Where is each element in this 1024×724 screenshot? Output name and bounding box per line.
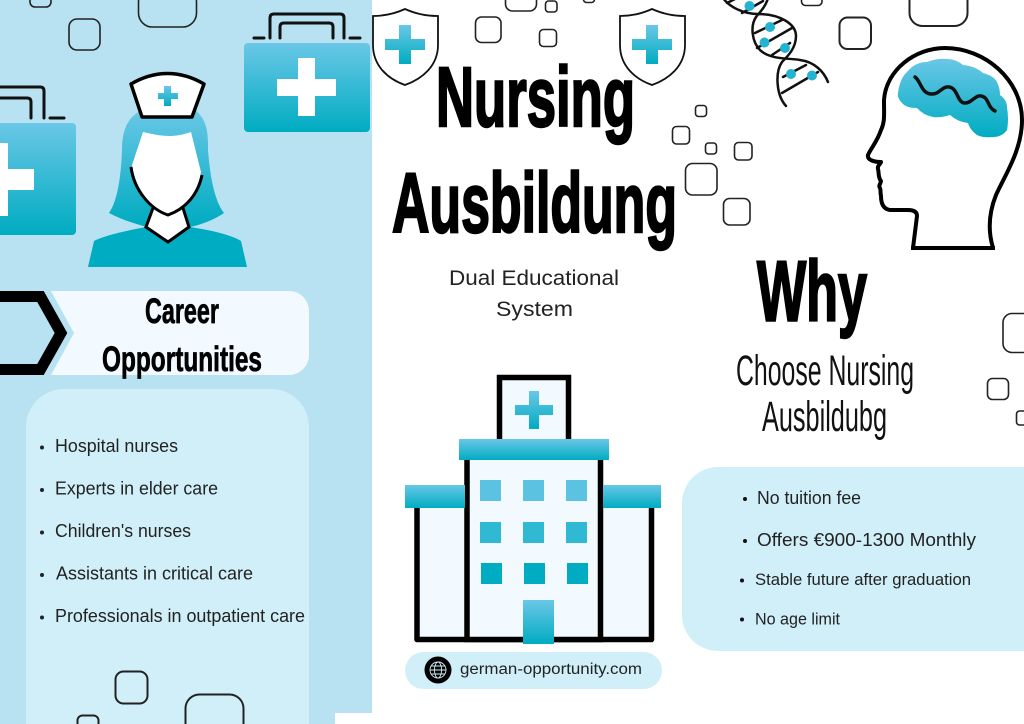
hospital tower cross [515, 391, 553, 429]
panel: career list [26, 389, 309, 724]
website pill [405, 652, 662, 689]
hospital roof bars [459, 439, 609, 460]
icon: shield left [373, 9, 438, 85]
panel: left career background [0, 0, 372, 724]
icon: globe [424, 656, 452, 684]
heading: career opportunities: Opportunities [102, 340, 262, 379]
subtitle: dual educational system: Dual Educational [449, 267, 619, 290]
white corner patch [335, 713, 372, 724]
nurse cap cross [158, 86, 178, 106]
heading: nursing ausbildung [392, 50, 677, 250]
icon: dna helix [723, 0, 828, 106]
heading: career opportunities: Career [145, 292, 219, 331]
decorative squares: centre [476, 0, 968, 225]
list: reasons: Stable future after graduation [755, 570, 971, 589]
icon: medical kit left [0, 87, 76, 235]
list: careers: Professionals in outpatient care [55, 606, 305, 626]
list: careers: Experts in elder care [55, 478, 218, 498]
decorative squares: list panel [78, 672, 244, 724]
nurse body [88, 227, 247, 267]
brain [898, 59, 1008, 137]
nurse hair [109, 110, 224, 227]
hospital door [523, 600, 554, 644]
icon: head with brain [868, 48, 1022, 248]
decorative squares: right [988, 314, 1024, 425]
nurse neck [146, 208, 189, 242]
heading: choose nursing ausbildubg: Ausbildubg [762, 393, 887, 441]
head outline [868, 48, 1022, 248]
hospital main block [467, 450, 600, 640]
list: reasons: No age limit [755, 610, 840, 628]
nurse cap [131, 74, 204, 117]
hospital wings [417, 495, 652, 640]
icon: medical kit right [244, 14, 370, 132]
brain fold [915, 77, 995, 111]
panel: career opportunities header [0, 291, 309, 379]
nurse face [132, 132, 201, 215]
decorative squares: left panel top [30, 0, 196, 50]
list: reasons: Offers €900-1300 Monthly [757, 530, 976, 550]
heading: choose nursing ausbildubg [736, 347, 914, 441]
list: careers: Hospital nurses [55, 436, 178, 456]
heading: why: Why [757, 244, 867, 340]
list: reasons: No tuition fee [757, 488, 861, 508]
heading: nursing ausbildung: Ausbildung [392, 156, 677, 250]
icon: nurse [88, 74, 247, 267]
heading: career opportunities [102, 292, 262, 379]
hospital windows [480, 480, 588, 584]
list: careers [40, 436, 305, 626]
panel: why list [682, 467, 1024, 651]
list: reasons [740, 488, 976, 628]
subtitle: dual educational system: System [496, 298, 573, 321]
subtitle: dual educational system [449, 267, 619, 321]
list: careers: Assistants in critical care [56, 564, 253, 584]
icon: hospital [405, 378, 661, 644]
heading: nursing ausbildung: Nursing [436, 50, 635, 144]
icon: shield right [620, 9, 685, 85]
website url: german-opportunity.com [460, 661, 642, 678]
list: careers: Children's nurses [55, 521, 191, 541]
icon: hexagon outline [0, 296, 61, 370]
hospital tower [500, 378, 568, 448]
